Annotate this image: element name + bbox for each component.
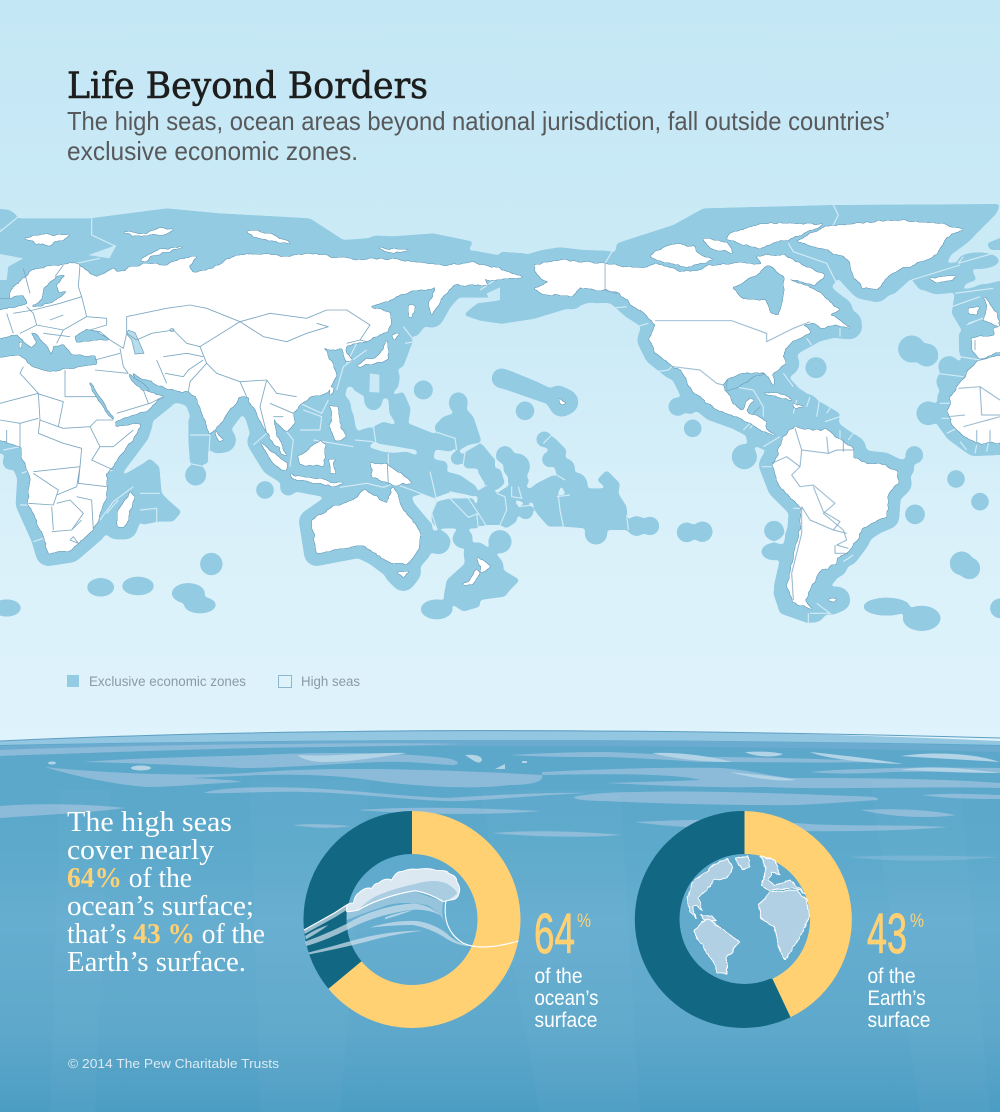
ocean panel	[0, 730, 1000, 1112]
donut chart: 43 percent	[635, 811, 852, 1028]
summary text: The high seas	[67, 806, 232, 838]
stat: 64 percent of the ocean's surface: surface	[534, 1009, 598, 1032]
country borders east	[0, 265, 388, 543]
icon: wave	[304, 869, 518, 954]
stat: 43 percent of the Earth's surface: 43	[867, 902, 907, 966]
icon: globe	[680, 854, 810, 984]
stat: 43 percent of the Earth's surface: surface	[868, 1009, 930, 1032]
country borders west	[605, 263, 1000, 600]
summary text: that’s 43 % of the	[67, 918, 265, 950]
light rays	[50, 780, 990, 1112]
summary text	[67, 806, 265, 978]
bright surface glints	[48, 752, 1000, 781]
land masses	[0, 220, 1000, 610]
stat: 43 percent of the Earth's surface: Earth’s	[868, 987, 926, 1010]
donut chart: 64 percent	[303, 811, 520, 1028]
stat: 64 percent of the ocean's surface: 64	[534, 902, 575, 966]
stat: 43 percent of the Earth's surface	[867, 902, 930, 1032]
summary text: cover nearly	[67, 834, 215, 866]
stat: 43 percent of the Earth's surface: %	[910, 911, 924, 932]
background: pale sky blue	[0, 0, 1000, 760]
subtitle: exclusive economic zones.	[67, 136, 358, 166]
ocean surface band	[0, 730, 1000, 745]
subtitle: The high seas, ocean areas beyond national jurisdiction, fall outside countries’	[67, 106, 890, 136]
high-seas pockets inside arctic EEZ	[0, 245, 500, 393]
summary text: ocean’s surface;	[67, 890, 254, 922]
legend: exclusive economic zones: Exclusive economic zones	[89, 674, 246, 689]
EEZ zones	[0, 204, 1000, 631]
stat: 64 percent of the ocean's surface: %	[577, 911, 591, 932]
stat: 64 percent of the ocean's surface: ocean’s	[534, 987, 598, 1010]
surface waves	[0, 743, 1000, 861]
world map	[0, 204, 1000, 631]
inland and marginal seas	[0, 265, 783, 422]
stat: 64 percent of the ocean's surface	[534, 902, 598, 1032]
title: Life Beyond Borders	[67, 66, 428, 107]
stat: 43 percent of the Earth's surface: of the	[868, 965, 916, 988]
summary text: Earth’s surface.	[67, 946, 246, 978]
stat: 64 percent of the ocean's surface: of the	[534, 965, 582, 988]
legend: high seas: High seas	[301, 674, 360, 689]
summary text: 64% of the	[67, 862, 192, 894]
copyright footer: © 2014 The Pew Charitable Trusts	[68, 1056, 280, 1071]
EEZ boundary lines	[0, 205, 993, 623]
subtitle	[67, 106, 890, 166]
Caspian Sea	[127, 330, 144, 354]
